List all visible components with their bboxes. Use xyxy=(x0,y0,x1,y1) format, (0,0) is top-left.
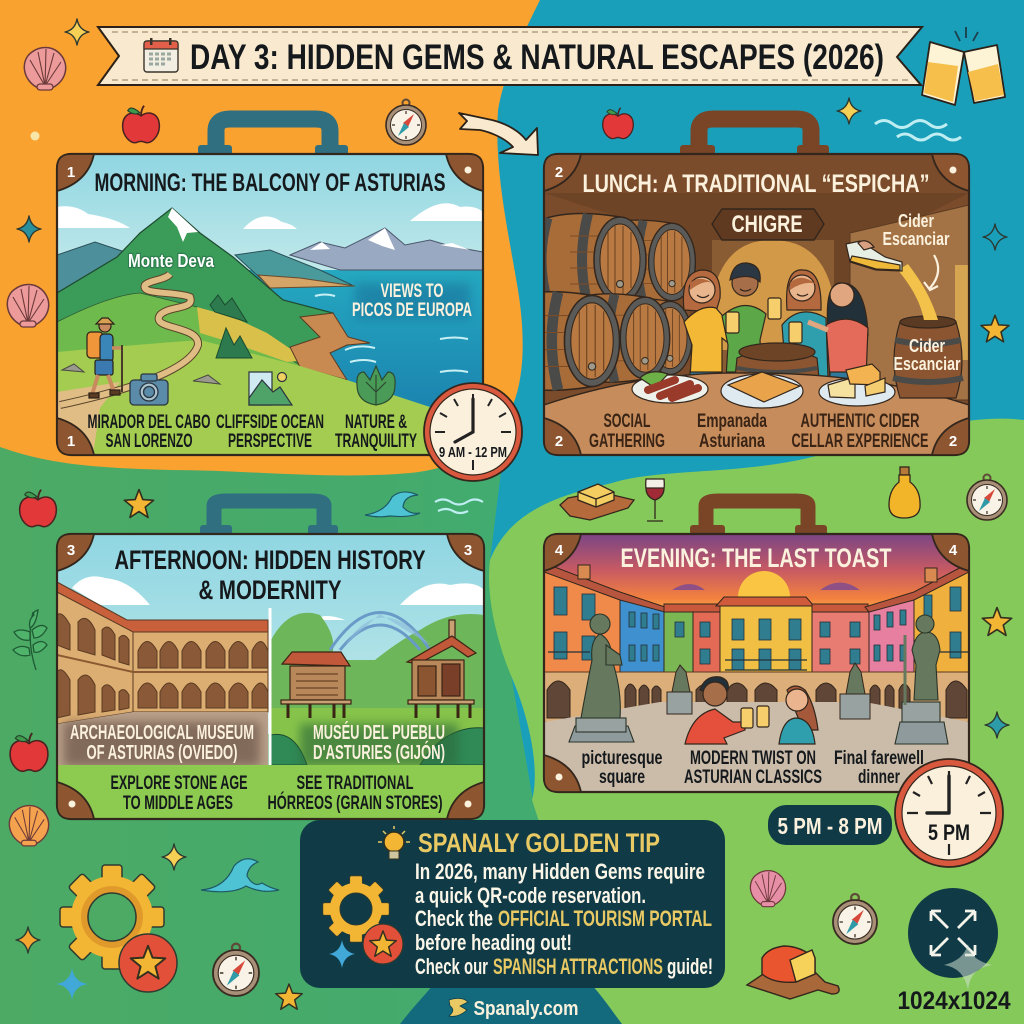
caption: cliffside: PERSPECTIVE xyxy=(228,431,312,452)
small arrow xyxy=(924,255,938,290)
caption: stone age: EXPLORE STONE AGE xyxy=(110,773,248,794)
caption: social gathering: GATHERING xyxy=(589,431,665,452)
hórreo: right xyxy=(407,620,476,718)
arcade xyxy=(544,672,969,722)
pouring cider xyxy=(898,264,938,320)
windows xyxy=(554,587,961,670)
cider bottle xyxy=(846,241,902,271)
caption: empanada: Empanada xyxy=(697,411,767,432)
lower strip xyxy=(57,765,484,819)
label: archaeological museum: OF ASTURIAS (OVIEDO) xyxy=(86,742,238,764)
icon: clinking cider glasses xyxy=(922,27,1005,105)
corners: 3 xyxy=(464,542,472,559)
icon: red star badge xyxy=(119,934,177,992)
icon: compass xyxy=(833,894,877,944)
caption: farewell dinner xyxy=(834,748,924,788)
icon: plant xyxy=(357,366,395,405)
caption: social gathering xyxy=(589,411,665,452)
caption: empanada: Asturiana xyxy=(699,431,765,452)
afternoon heading xyxy=(114,545,426,605)
label: archaeological museum: ARCHAEOLOGICAL MUSEUM xyxy=(70,722,254,744)
caption: modern twist xyxy=(684,748,822,788)
footer band xyxy=(400,985,622,1024)
divider xyxy=(268,608,272,766)
caption: hórreos: SEE TRADITIONAL xyxy=(296,773,414,794)
title banner xyxy=(98,27,922,85)
buildings xyxy=(545,564,968,672)
open air museum xyxy=(271,613,484,710)
square floor xyxy=(544,702,969,792)
label: views to Picos de Europa: VIEWS TO xyxy=(380,281,444,302)
label: views to Picos de Europa: PICOS DE EUROPA xyxy=(352,300,472,321)
hiker xyxy=(87,318,122,398)
corners xyxy=(544,534,969,792)
icon: cheese on board xyxy=(747,946,839,999)
icon: camera xyxy=(130,374,168,405)
label: cider escanciar top: Cider xyxy=(898,211,934,231)
frame xyxy=(57,534,484,819)
illustration: cider cellar xyxy=(545,155,968,454)
tip line 3: Check the xyxy=(415,906,493,931)
background: dark green xyxy=(0,440,640,1024)
label: cider escanciar barrel: Escanciar xyxy=(894,354,960,374)
icon: apple xyxy=(603,108,633,139)
statue: man xyxy=(895,615,948,744)
size label: 1024x1024 xyxy=(898,987,1011,1015)
icon: oil bottle xyxy=(889,467,920,518)
caption: mirador xyxy=(88,412,210,452)
icon: orange shell xyxy=(9,806,49,846)
icon: star xyxy=(124,490,154,517)
caption: picturesque square: picturesque xyxy=(582,748,662,769)
caption: farewell dinner: dinner xyxy=(858,767,900,788)
panel: afternoon suitcase xyxy=(57,501,484,819)
icon: pink shell xyxy=(750,871,786,907)
handle xyxy=(690,501,827,535)
label: chigre: CHIGRE xyxy=(732,211,802,238)
afternoon heading: & MODERNITY xyxy=(198,575,342,605)
corners: 4 xyxy=(949,542,958,559)
icon: tip sparkle xyxy=(329,940,355,968)
corners xyxy=(57,534,484,819)
icon: water ripples xyxy=(875,120,961,140)
views backdrop xyxy=(355,283,470,319)
icon: calendar xyxy=(144,38,178,72)
label: muséu del pueblu xyxy=(313,721,445,764)
illustration: museum and hórreos xyxy=(57,534,484,819)
label: archaeological museum xyxy=(70,722,254,764)
icon: tip star badge xyxy=(363,924,403,964)
panel: golden tip xyxy=(300,820,725,988)
caption: stone age: TO MIDDLE AGES xyxy=(123,793,233,814)
label: views to Picos de Europa xyxy=(352,281,472,321)
corners: 2 xyxy=(555,433,563,450)
icon: apple xyxy=(10,733,48,771)
plate: empanada xyxy=(721,372,803,408)
panel: evening suitcase xyxy=(544,501,969,792)
icon: wave xyxy=(201,859,279,892)
icon: shell xyxy=(7,284,49,327)
handle xyxy=(680,119,829,155)
illustration: coastal mountain landscape xyxy=(57,154,483,455)
person: green shirt xyxy=(722,263,766,386)
couple toasting xyxy=(685,677,818,744)
statue: woman xyxy=(569,614,634,742)
caption: cliffside: CLIFFSIDE OCEAN xyxy=(216,412,324,433)
caption: picturesque square: square xyxy=(599,767,645,788)
icon: wave xyxy=(365,492,420,517)
label: cider escanciar barrel xyxy=(894,336,960,374)
label: muséu del pueblu: MUSÉU DEL PUEBLU xyxy=(313,721,445,744)
plate: sausages xyxy=(632,372,708,403)
caption: social gathering: SOCIAL xyxy=(604,411,651,432)
label: cider escanciar top: Escanciar xyxy=(882,229,950,249)
tip line 5: Check our xyxy=(415,954,488,979)
background: light green xyxy=(489,419,1024,1024)
icon: compass xyxy=(213,944,259,996)
person: red shirt xyxy=(808,283,868,386)
person: yellow shirt xyxy=(682,269,727,374)
caption: picturesque square xyxy=(582,748,662,788)
clock: 9 AM - 12 PM xyxy=(424,383,522,481)
caption: authentic cider xyxy=(792,411,928,452)
corners: 3 xyxy=(67,542,75,559)
label: cider escanciar barrel: Cider xyxy=(909,336,945,356)
icon: teal sparkle xyxy=(17,216,41,242)
icon: apple xyxy=(123,106,159,143)
icon: compass xyxy=(967,474,1007,520)
corners: 4 xyxy=(555,542,564,559)
illustration: plaza at sunset xyxy=(544,534,969,792)
icon: expand arrows xyxy=(931,911,975,955)
icon: light bulb xyxy=(378,826,410,859)
cider barrel xyxy=(893,316,963,398)
clock: 5 PM: 5 PM xyxy=(928,820,970,845)
icon: dark sparkle xyxy=(983,224,1007,250)
frame xyxy=(544,534,969,792)
caption: cliffside xyxy=(216,412,324,452)
icon: teal sparkle xyxy=(985,712,1009,738)
plate: cheese xyxy=(819,364,895,406)
morning heading: MORNING: THE BALCONY OF ASTURIAS xyxy=(94,169,446,197)
icon: leaves xyxy=(13,610,47,670)
handle xyxy=(200,501,338,535)
tip line 5: guide! xyxy=(667,954,713,979)
label: Monte Deva: Monte Deva xyxy=(128,251,215,271)
expand badge xyxy=(908,888,998,978)
evening heading: EVENING: THE LAST TOAST xyxy=(620,543,892,573)
icon: apple xyxy=(20,490,56,527)
corners: 2 xyxy=(555,164,563,181)
tip line 4: before heading out! xyxy=(415,930,572,955)
person: teal shirt xyxy=(782,270,828,378)
icon: big gear xyxy=(60,865,164,969)
caption: modern twist: ASTURIAN CLASSICS xyxy=(684,767,822,788)
caption: nature: TRANQUILITY xyxy=(335,431,417,452)
museum caption backdrop xyxy=(64,722,260,766)
handle xyxy=(198,119,348,155)
table xyxy=(544,373,969,455)
right caption backdrop xyxy=(300,724,458,766)
watermark sparkle xyxy=(944,944,992,990)
tip line 5: SPANISH ATTRACTIONS xyxy=(493,954,663,979)
icon: landscape picture xyxy=(249,372,292,405)
people toasting xyxy=(683,263,868,386)
icon: sparkle xyxy=(65,19,89,45)
time pill: 5 PM - 8 PM: 5 PM - 8 PM xyxy=(778,813,882,839)
icon: wine glass xyxy=(646,479,664,521)
corners xyxy=(544,154,969,455)
tip line 5 xyxy=(415,954,713,979)
caption: empanada xyxy=(697,411,767,452)
tip line 1: In 2026, many Hidden Gems require xyxy=(415,859,705,884)
tip heading: SPANALY GOLDEN TIP xyxy=(418,828,660,858)
centre barrel xyxy=(735,342,820,375)
label: cider escanciar top xyxy=(882,211,950,249)
caption: nature xyxy=(335,412,417,452)
afternoon heading: AFTERNOON: HIDDEN HISTORY xyxy=(114,545,426,575)
arrow: morning to lunch xyxy=(459,113,538,155)
tip line 3 xyxy=(415,906,712,931)
caption: farewell dinner: Final farewell xyxy=(834,748,924,769)
caption: authentic cider: CELLAR EXPERIENCE xyxy=(792,431,928,452)
lunch heading: LUNCH: A TRADITIONAL “ESPICHA” xyxy=(582,170,930,198)
frame xyxy=(57,154,483,455)
corners xyxy=(57,154,483,455)
tip line 2: a quick QR-code reservation. xyxy=(415,883,646,908)
decorative dot xyxy=(30,132,40,140)
icon: sparkle xyxy=(837,98,861,124)
hórreo: left xyxy=(281,652,351,718)
corners: 1 xyxy=(67,164,75,181)
icon: ripples xyxy=(435,500,483,513)
footer logo icon xyxy=(449,998,468,1016)
frame xyxy=(544,154,969,455)
time pill: 5 PM - 8 PM xyxy=(768,805,892,845)
caption: nature: NATURE & xyxy=(345,412,407,433)
clock: 9 AM - 12 PM: 9 AM - 12 PM xyxy=(439,444,507,461)
museum xyxy=(57,582,268,724)
icon: orange sparkle xyxy=(16,927,40,953)
corners: 2 xyxy=(949,433,957,450)
small statues xyxy=(667,663,870,719)
panel: lunch suitcase xyxy=(488,119,969,455)
label: muséu del pueblu: D'ASTURIES (GIJÓN) xyxy=(313,740,445,764)
caption: hórreos xyxy=(268,773,442,814)
icon: tip gear xyxy=(323,876,389,942)
icon: blue sparkle xyxy=(56,968,88,1000)
clock: 5 PM xyxy=(895,759,1003,867)
icon: sparkle xyxy=(162,844,186,870)
icon: compass xyxy=(386,100,426,145)
caption: modern twist: MODERN TWIST ON xyxy=(690,748,816,769)
icon: shell xyxy=(24,48,66,90)
icon: star xyxy=(276,984,302,1009)
sign: Chigre xyxy=(712,209,824,240)
caption: hórreos: HÓRREOS (GRAIN STORES) xyxy=(268,792,442,814)
panel: morning suitcase xyxy=(57,119,483,455)
caption: mirador: SAN LORENZO xyxy=(106,431,192,452)
caption: stone age xyxy=(110,773,248,814)
corners: 1 xyxy=(67,433,75,450)
caption: mirador: MIRADOR DEL CABO xyxy=(88,412,210,433)
footer text: Spanaly.com xyxy=(474,998,578,1020)
icon: star xyxy=(981,315,1009,342)
background: orange xyxy=(0,0,540,475)
tip line 3: OFFICIAL TOURISM PORTAL xyxy=(498,906,712,931)
icon: star xyxy=(982,608,1012,635)
icon: cheese board xyxy=(560,484,634,520)
caption: authentic cider: AUTHENTIC CIDER xyxy=(800,411,920,432)
